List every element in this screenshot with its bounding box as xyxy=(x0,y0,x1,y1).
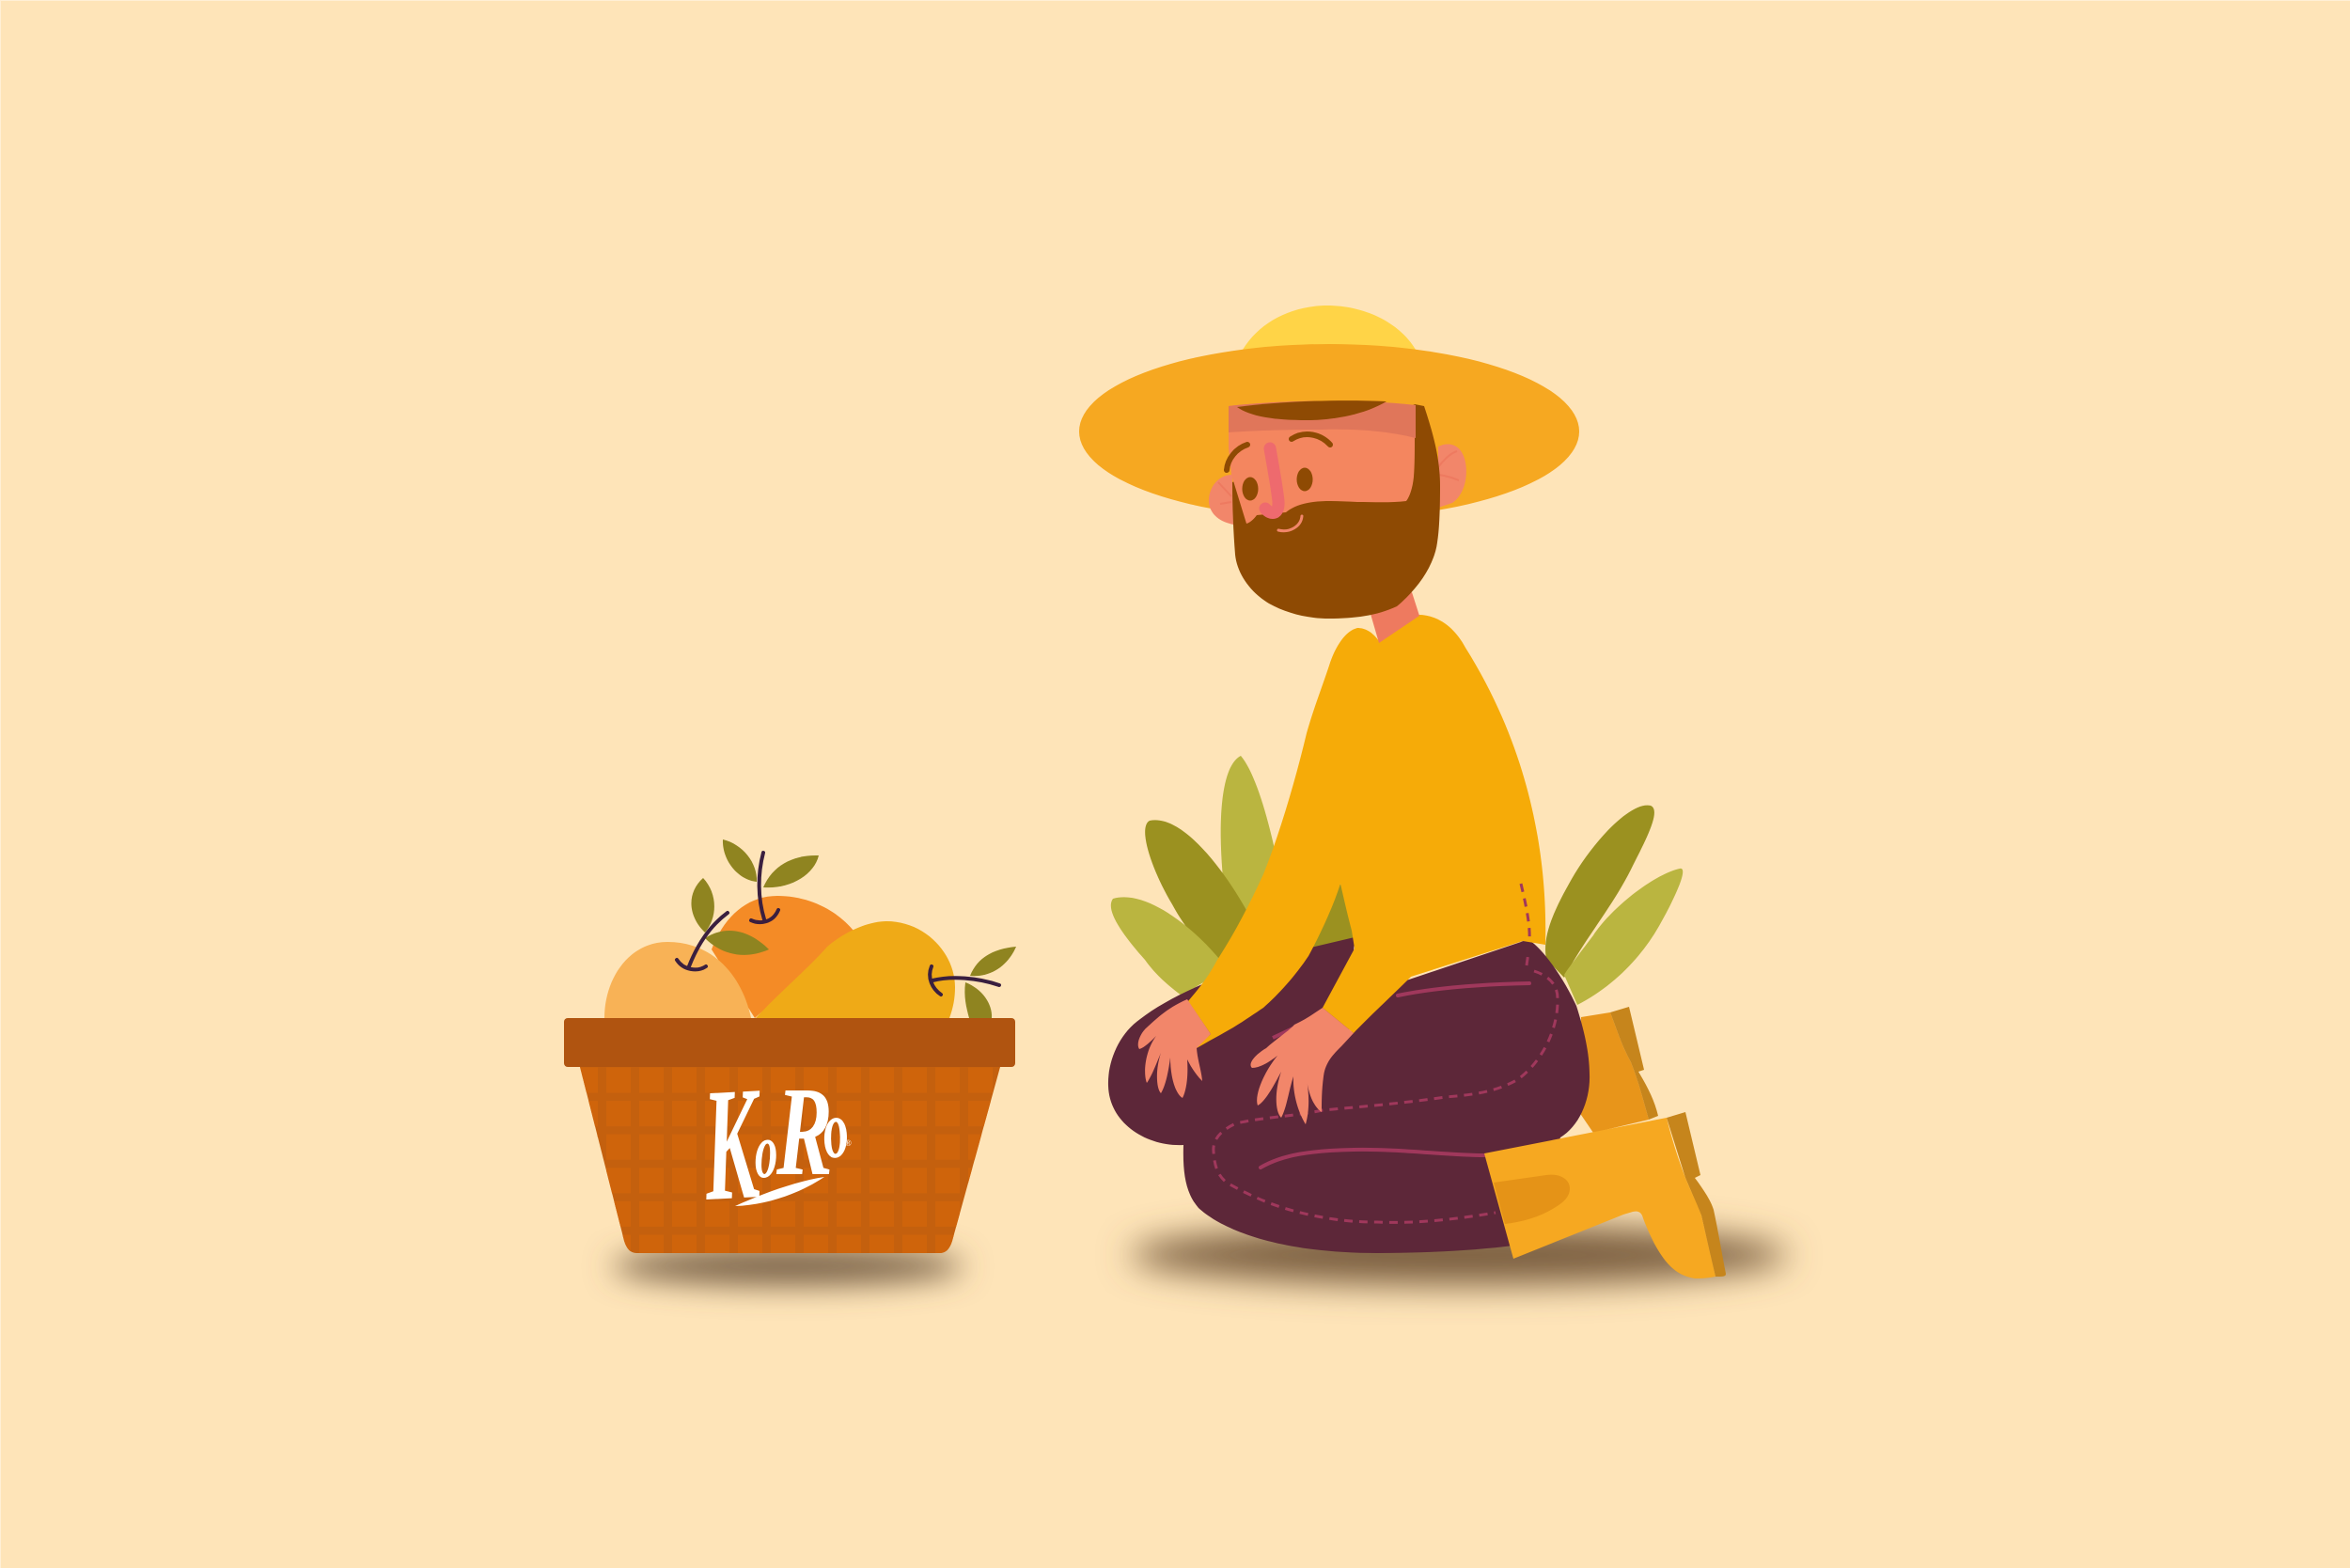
fruit leaves behind xyxy=(691,839,1016,1018)
leaf: left dark xyxy=(1145,820,1255,964)
hat brim xyxy=(1079,344,1579,519)
face xyxy=(1229,401,1416,524)
leaf: right light xyxy=(1564,869,1683,1005)
stitch on shirt xyxy=(1521,884,1529,941)
trousers xyxy=(1108,937,1590,1253)
beard xyxy=(1232,404,1440,619)
trouser seams xyxy=(1214,952,1558,1222)
eye right xyxy=(1297,468,1312,491)
stems xyxy=(677,853,999,995)
ground shadow: basket xyxy=(612,1247,964,1285)
logo letter R: R xyxy=(776,1059,833,1202)
logo letter o: o xyxy=(755,1106,777,1194)
neck xyxy=(1371,592,1419,643)
solid seams xyxy=(1398,983,1529,996)
logo registered mark: ® xyxy=(845,1138,852,1148)
front boot xyxy=(1484,1112,1726,1278)
right hand xyxy=(1250,1008,1354,1124)
hair xyxy=(1237,400,1386,420)
ear left xyxy=(1209,475,1233,525)
boot sole xyxy=(1667,1112,1726,1277)
logo letter o 2: o xyxy=(818,1082,853,1176)
fruit: orange mango xyxy=(712,896,854,1018)
fruit: yellow mango xyxy=(756,921,955,1018)
leaf: right dark xyxy=(1545,806,1654,978)
ground shadow: farmer xyxy=(1130,1225,1788,1285)
eye left xyxy=(1243,478,1258,500)
fruit: peach mango xyxy=(604,942,751,1018)
boot sole xyxy=(1610,1007,1658,1120)
leaf: left light xyxy=(1111,897,1227,996)
logo letter K: K xyxy=(698,1054,768,1235)
back boot xyxy=(1579,1007,1658,1133)
hat crown xyxy=(1243,306,1416,350)
boot upper xyxy=(1579,1012,1649,1133)
head xyxy=(1079,306,1579,643)
basket rim xyxy=(564,1018,1015,1067)
ear lines xyxy=(1218,451,1459,504)
boot upper xyxy=(1484,1118,1716,1278)
mouth xyxy=(1278,516,1302,531)
nose xyxy=(1265,448,1278,513)
leaf: centre dark xyxy=(1302,884,1358,959)
farmer xyxy=(1079,306,1726,1278)
boot patch xyxy=(1494,1175,1570,1224)
eyebrows xyxy=(1227,434,1330,470)
basket of fruit xyxy=(564,839,1016,1253)
plant behind farmer xyxy=(1111,756,1683,1005)
left hand xyxy=(1138,999,1211,1098)
leaf: back light xyxy=(1221,756,1283,956)
KoRo logo xyxy=(698,1054,853,1235)
basket body xyxy=(580,1067,1000,1253)
dashed stitching xyxy=(1214,952,1558,1222)
ear right xyxy=(1438,444,1466,508)
basket weave xyxy=(564,1067,1015,1253)
logo swash xyxy=(735,1177,824,1206)
forehead shadow xyxy=(1229,401,1416,438)
shirt xyxy=(1188,615,1545,1048)
leaf in front xyxy=(705,931,769,955)
